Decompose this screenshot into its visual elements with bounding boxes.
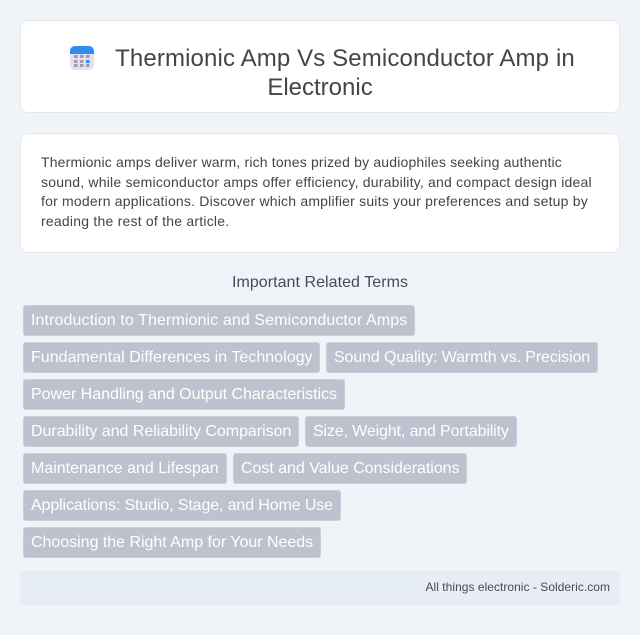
tag: cost and value: Cost and Value Considerations (241, 460, 460, 477)
tag: sound quality (326, 342, 598, 373)
intro paragraph: sound, while semiconductor amps offer efficiency, durability, and compact design ideal (41, 174, 592, 190)
intro paragraph (41, 154, 592, 229)
tag: sound quality: Sound Quality: Warmth vs. Precision (334, 349, 590, 366)
intro paragraph: reading the rest of the article. (41, 212, 229, 228)
tag: choosing the right amp: Choosing the Right Amp for Your Needs (31, 534, 313, 551)
tag: power handling: Power Handling and Output Characteristics (31, 386, 337, 403)
tag: maintenance (23, 453, 227, 484)
tag: introduction (23, 305, 415, 336)
tag: durability: Durability and Reliability Comparison (31, 423, 291, 440)
tag: introduction: Introduction to Thermionic and Semiconductor Amps (31, 312, 407, 329)
tag: power handling (23, 379, 345, 410)
tag: applications (23, 490, 341, 521)
tag: choosing the right amp (23, 527, 321, 558)
title (115, 45, 575, 101)
panel: intro text card (20, 133, 620, 253)
title: Thermionic Amp Vs Semiconductor Amp in (115, 45, 575, 72)
tag: size and weight: Size, Weight, and Portability (313, 423, 509, 440)
tag: size and weight (305, 416, 517, 447)
tag: applications: Applications: Studio, Stage, and Home Use (31, 497, 333, 514)
tag: fundamental differences (23, 342, 320, 373)
icon: calendar grid (70, 46, 94, 70)
intro paragraph: Thermionic amps deliver warm, rich tones prized by audiophiles seeking authentic (41, 154, 562, 170)
intro paragraph: for modern applications. Discover which amplifier suits your preferences and setup by (41, 193, 588, 209)
tag: maintenance: Maintenance and Lifespan (31, 460, 219, 477)
tag: fundamental differences: Fundamental Differences in Technology (31, 349, 313, 366)
heading: important related terms: Important Related Terms (232, 274, 408, 291)
tag: cost and value (233, 453, 467, 484)
panel: related term tags (23, 305, 598, 558)
title: Electronic (267, 74, 373, 101)
footer credit: All things electronic - Solderic.com (426, 580, 610, 594)
tag: durability (23, 416, 299, 447)
panel: title card (20, 20, 620, 113)
footer bar (20, 571, 620, 605)
